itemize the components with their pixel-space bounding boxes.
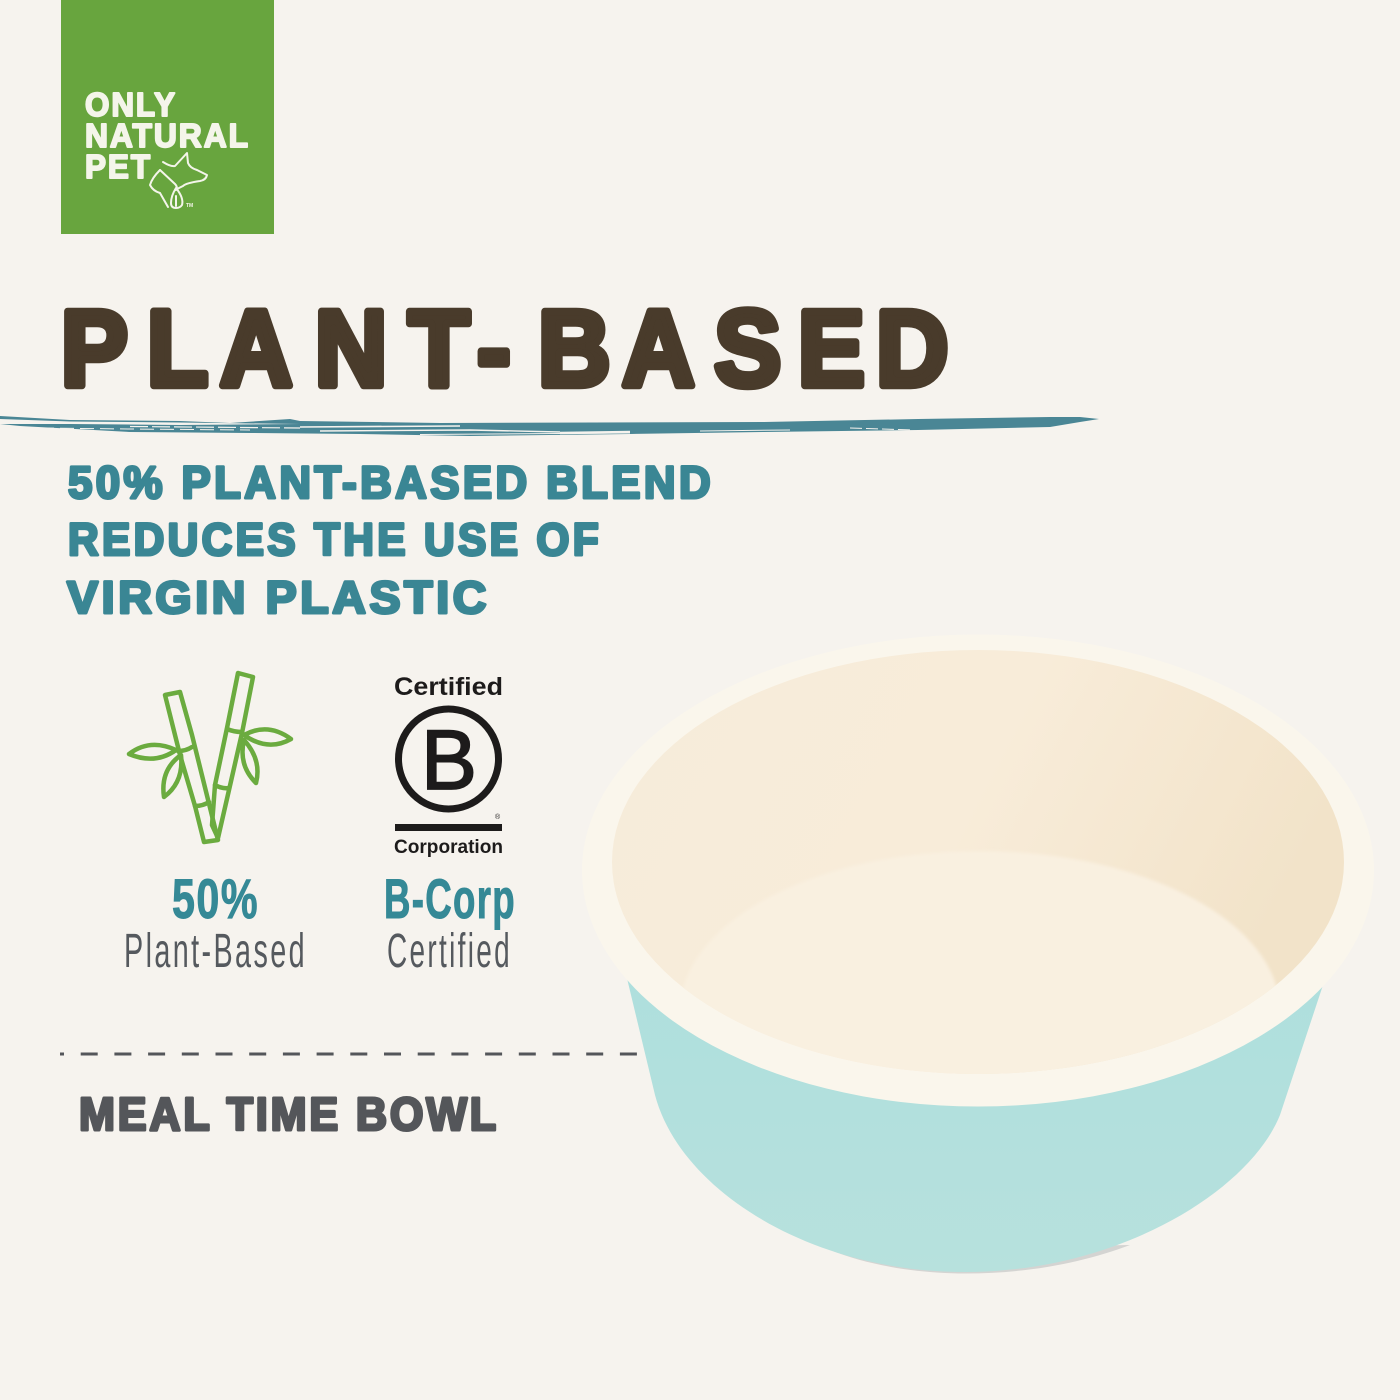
logo: Only Natural Pet: ONLY bbox=[85, 86, 177, 123]
bowl shadow line bbox=[830, 1245, 1130, 1274]
subheading bbox=[67, 457, 714, 623]
logo: Only Natural Pet: TM bbox=[186, 203, 193, 209]
logo: Only Natural Pet bbox=[61, 0, 274, 234]
logo: Only Natural Pet: PET bbox=[85, 148, 152, 185]
bowl rim bbox=[582, 634, 1374, 1106]
brush stroke divider bbox=[0, 416, 1099, 436]
subheading: REDUCES THE USE OF bbox=[68, 514, 602, 565]
bowl interior bbox=[612, 650, 1344, 1074]
label: 50% Plant-Based: Plant-Based bbox=[124, 925, 307, 978]
subheading: VIRGIN PLASTIC bbox=[67, 572, 490, 623]
icon: Certified B Corporation: Certified bbox=[394, 673, 503, 701]
title: PLANT-BASED: PLANT-BASED bbox=[61, 289, 949, 409]
dashed divider bbox=[60, 1052, 640, 1056]
icon: Certified B Corporation: Corporation bbox=[394, 837, 503, 858]
bowl outer body bbox=[625, 970, 1323, 1272]
logo: Only Natural Pet: NATURAL bbox=[85, 117, 250, 154]
bowl illustration bbox=[582, 634, 1374, 1274]
label: 50% Plant-Based: 50% bbox=[172, 867, 259, 930]
icon: bamboo bbox=[129, 673, 291, 842]
label: B-Corp Certified bbox=[384, 867, 516, 978]
label: 50% Plant-Based bbox=[124, 867, 307, 978]
subheading: 50% PLANT-BASED BLEND bbox=[68, 457, 714, 508]
label: B-Corp Certified: Certified bbox=[387, 925, 512, 978]
icon: Certified B Corporation bbox=[394, 673, 503, 858]
bowl floor bbox=[862, 853, 1276, 1074]
icon: Certified B Corporation: B bbox=[421, 713, 477, 807]
icon: Certified B Corporation: ® bbox=[495, 813, 501, 821]
product name: MEAL TIME BOWL bbox=[79, 1088, 499, 1140]
label: B-Corp Certified: B-Corp bbox=[384, 867, 516, 930]
